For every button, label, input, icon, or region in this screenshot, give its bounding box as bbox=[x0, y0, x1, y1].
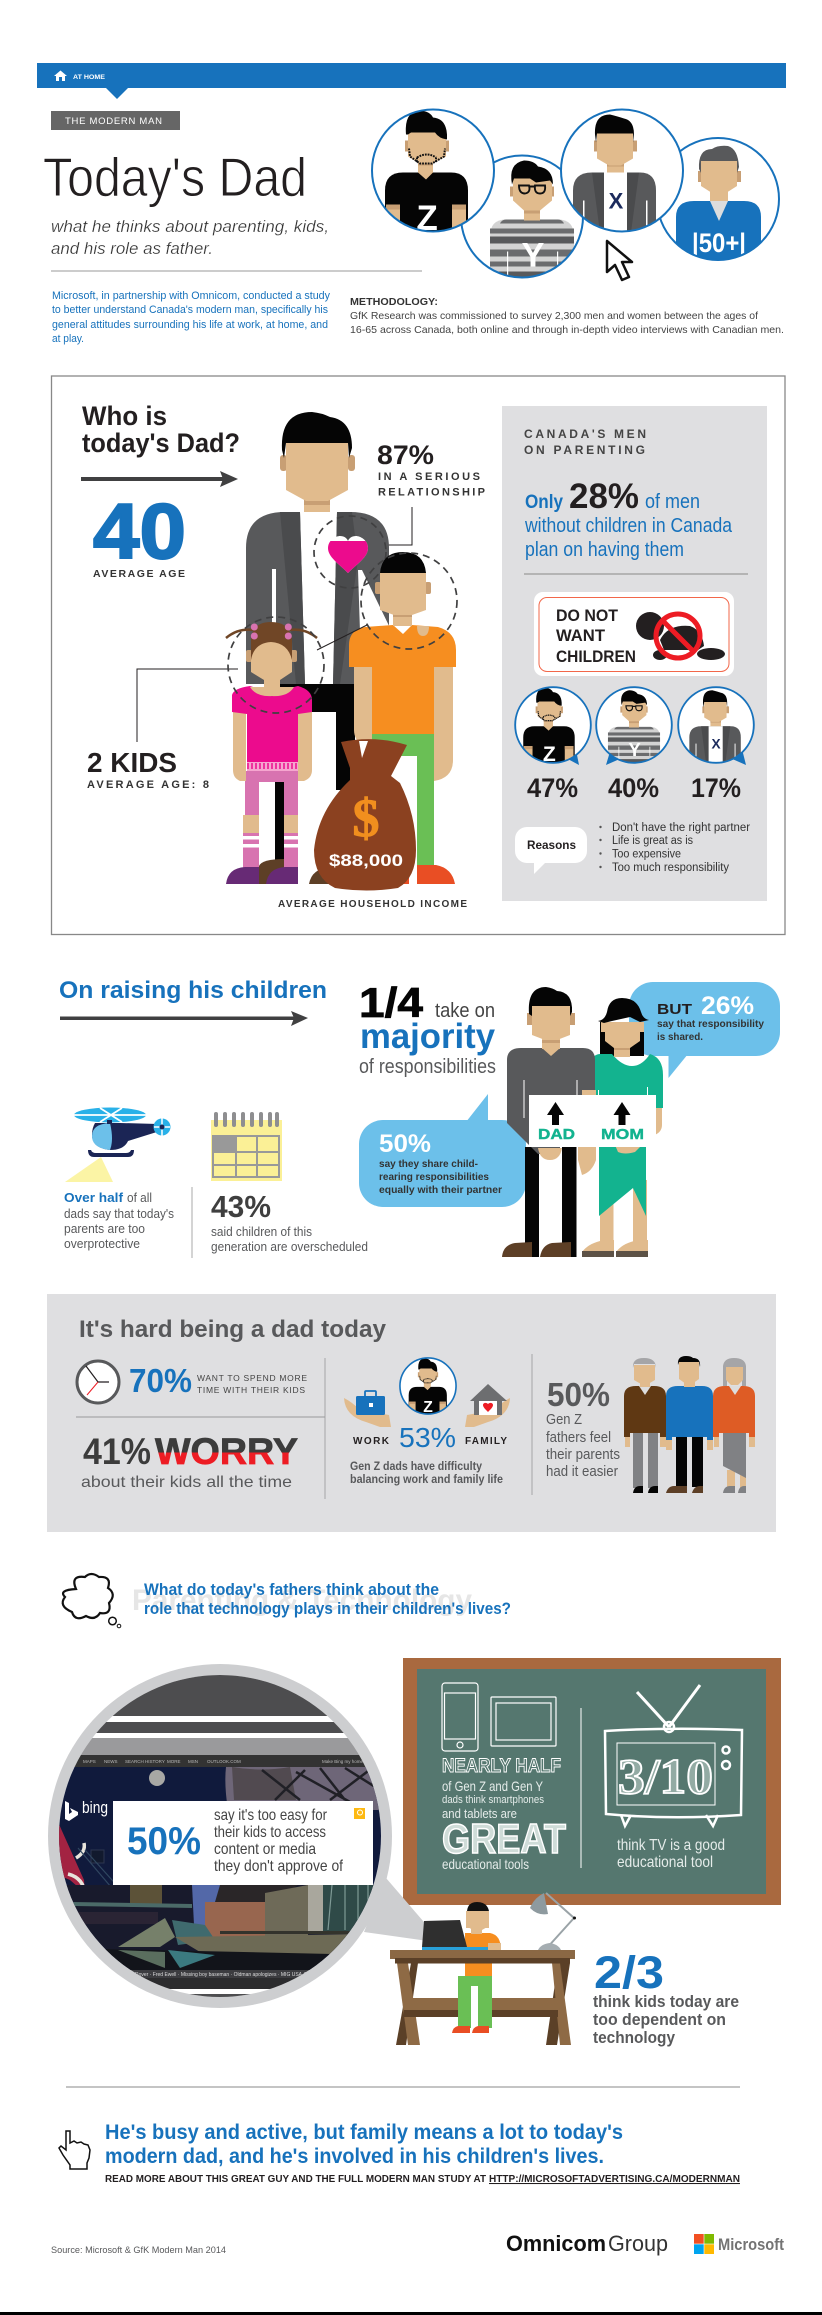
reasons list: Don't have the right partner bbox=[612, 822, 750, 834]
stat: 43% bbox=[211, 1189, 368, 1254]
portrait: X: X bbox=[609, 188, 624, 214]
stat: relationship bbox=[377, 440, 485, 498]
portrait: Z small: Z bbox=[543, 743, 556, 766]
reasons list bbox=[599, 822, 750, 874]
stat: 28%: of men bbox=[645, 491, 700, 513]
text: 26% shared: say that responsibility bbox=[657, 1018, 764, 1030]
portrait: Z small bbox=[515, 687, 591, 766]
icon: clock bbox=[77, 1361, 119, 1403]
card: 50%: they don't approve of bbox=[214, 1858, 343, 1875]
text: 26% shared: is shared. bbox=[657, 1031, 703, 1043]
callout: reasons: Reasons bbox=[527, 838, 576, 852]
moon bbox=[149, 1770, 165, 1786]
intro paragraph: Microsoft, in partnership with Omnicom, conducted a study bbox=[52, 290, 330, 302]
text: over half: Over half bbox=[64, 1190, 124, 1205]
card: do not want children: DO NOT bbox=[556, 606, 619, 625]
stat: 2/3: technology bbox=[593, 2028, 675, 2047]
stat: one quarter: take on bbox=[435, 1000, 495, 1022]
figure: grandmother bbox=[713, 1358, 755, 1493]
icon: home bbox=[54, 70, 67, 81]
title: Today's Dad bbox=[43, 146, 307, 208]
nav text: MSN bbox=[188, 1759, 198, 1764]
logo: microsoft bbox=[694, 2234, 784, 2254]
text: nearly half bbox=[442, 1756, 566, 1872]
portrait: X bbox=[561, 110, 683, 232]
stat: 28%: without children in Canada bbox=[524, 515, 733, 537]
text: nearly half: GREAT bbox=[442, 1815, 566, 1862]
header bar bbox=[37, 63, 786, 99]
figure: child legs bbox=[452, 1963, 492, 2033]
heading: today's Dad? bbox=[82, 428, 240, 458]
text: 50% share: say they share child- bbox=[379, 1158, 478, 1170]
stat: one quarter: majority bbox=[360, 1017, 496, 1056]
panel: it's hard being a dad today bbox=[47, 1294, 776, 1532]
portrait: 50+ bbox=[657, 138, 779, 261]
stat: 2/3 bbox=[593, 1947, 739, 2047]
nav text: MORE bbox=[167, 1759, 180, 1764]
portrait: Y small: Y bbox=[628, 739, 641, 760]
text: over half bbox=[64, 1190, 174, 1251]
text: nearly half: NEARLY HALF bbox=[442, 1756, 561, 1777]
icon: helicopter bbox=[65, 1108, 170, 1182]
figure: dad bbox=[502, 987, 596, 1257]
stat: kids: AVERAGE AGE: 8 bbox=[87, 779, 209, 791]
text: 50% share: equally with their partner bbox=[379, 1184, 502, 1196]
methodology: METHODOLOGY: bbox=[350, 296, 438, 308]
stat: kids bbox=[87, 747, 209, 791]
text: tv bbox=[617, 1837, 725, 1871]
lamp bbox=[530, 1893, 576, 1950]
stat: 2/3: too dependent on bbox=[593, 2010, 726, 2029]
sign: dad and mom bbox=[529, 1095, 656, 1147]
stat: relationship: IN A SERIOUS bbox=[378, 471, 480, 483]
heading: Who is bbox=[82, 401, 167, 431]
closing statement: He's busy and active, but family means a lot to today's bbox=[105, 2121, 623, 2144]
desk bbox=[390, 1950, 575, 2045]
stat: 43%: 43% bbox=[211, 1189, 271, 1224]
desk scene bbox=[390, 1893, 576, 2045]
arrow bbox=[81, 471, 238, 487]
text: nearly half: educational tools bbox=[442, 1856, 529, 1872]
icon: no baby bbox=[636, 612, 725, 660]
nav text: Make Bing my home bbox=[322, 1759, 364, 1764]
stat: 41% worry: WORRY bbox=[155, 1431, 298, 1472]
panel: canada's men on parenting bbox=[502, 406, 767, 901]
text: 50% share bbox=[379, 1130, 502, 1196]
stat: 28%: plan on having them bbox=[525, 539, 684, 561]
portrait: Y: Y bbox=[522, 236, 545, 274]
stat: 53%: Gen Z dads have difficulty bbox=[350, 1461, 483, 1473]
nav text: SEARCH HISTORY bbox=[125, 1759, 165, 1764]
stat: 2/3: think kids today are bbox=[593, 1992, 739, 2011]
stat: 41% worry bbox=[81, 1431, 298, 1491]
callout: reasons bbox=[515, 827, 587, 874]
stat: 50%: had it easier bbox=[546, 1463, 618, 1480]
icon: phone and tablet bbox=[442, 1683, 556, 1751]
section tag: the modern man bbox=[51, 111, 180, 130]
figure: father bbox=[666, 1356, 713, 1493]
subtitle bbox=[51, 217, 329, 258]
portrait: X small bbox=[678, 687, 754, 765]
text: over half: overprotective bbox=[64, 1236, 140, 1251]
news strip: Rover · Fred Ewell · Missing boy baseman · Oldman apologizes · MIG USA-Germany bbox=[135, 1972, 325, 1978]
panel heading bbox=[524, 427, 646, 457]
card: 50%: say it's too easy for bbox=[214, 1807, 328, 1824]
closing statement: HTTP://MICROSOFTADVERTISING.CA/MODERNMAN bbox=[489, 2173, 740, 2185]
methodology: GfK Research was commissioned to survey 2,300 men and women between the ages of bbox=[350, 310, 758, 322]
portrait: Y bbox=[461, 156, 583, 278]
panel: who is today's dad bbox=[52, 376, 785, 934]
photo background bbox=[55, 1767, 385, 1970]
reasons list: Too expensive bbox=[612, 848, 681, 860]
portrait: Y small bbox=[596, 687, 672, 765]
stat: relationship: 87% bbox=[377, 440, 434, 470]
subtitle: what he thinks about parenting, kids, bbox=[51, 217, 329, 236]
text: tv: think TV is a good bbox=[617, 1837, 725, 1854]
stat: 28%: 28% bbox=[569, 477, 639, 516]
intro paragraph: at play. bbox=[52, 333, 84, 345]
technology question: What do today's fathers think about the bbox=[144, 1580, 439, 1599]
nav text: MAPS bbox=[83, 1759, 96, 1764]
icon: television bbox=[605, 1685, 742, 1826]
portrait: X small: X bbox=[711, 737, 721, 752]
stat: 41% worry: 41% bbox=[83, 1431, 151, 1472]
text: nearly half: dads think smartphones bbox=[442, 1794, 544, 1806]
stat: one quarter: of responsibilities bbox=[359, 1056, 496, 1078]
card: 50%: their kids to access bbox=[214, 1824, 326, 1841]
nav text: OUTLOOK.COM bbox=[207, 1759, 241, 1764]
sign: dad and mom: MOM bbox=[601, 1126, 644, 1143]
arrow bbox=[60, 1011, 308, 1026]
bing logo: bing bbox=[82, 1798, 108, 1817]
stat: 53% bbox=[350, 1422, 507, 1486]
text: tv: educational tool bbox=[617, 1854, 713, 1871]
figure: mom bbox=[582, 998, 663, 1257]
sign: dad and mom: DAD bbox=[538, 1126, 575, 1143]
text: over half: parents are too bbox=[64, 1221, 145, 1236]
heading bbox=[82, 401, 240, 458]
magnifier: bing screenshot bbox=[48, 1664, 442, 2008]
card: 50%: content or media bbox=[214, 1841, 316, 1858]
portrait: Z work life: Z bbox=[423, 1399, 433, 1416]
text: 26% shared: BUT bbox=[657, 1001, 692, 1018]
intro paragraph bbox=[52, 290, 330, 345]
text: over half: of all bbox=[127, 1190, 152, 1205]
stat: 70% bbox=[129, 1362, 307, 1399]
icon: hand pointer bbox=[59, 2131, 90, 2169]
methodology: 16-65 across Canada, both online and through in-depth video interviews with Canadian men. bbox=[350, 324, 784, 336]
stat: 3/10: 3/10 bbox=[618, 1748, 713, 1804]
logo: omnicom group bbox=[506, 2231, 668, 2256]
card: do not want children: CHILDREN bbox=[556, 647, 636, 666]
percentages: 47% bbox=[527, 773, 578, 803]
laptop bbox=[422, 1920, 488, 1950]
bing logo bbox=[65, 1801, 108, 1821]
icon: money bag: $ bbox=[352, 788, 380, 848]
stat: 43%: generation are overscheduled bbox=[211, 1239, 368, 1254]
stat: 50%: 50% bbox=[547, 1376, 610, 1413]
icon: work in hand bbox=[344, 1391, 391, 1427]
stat: 70%: WANT TO SPEND MORE bbox=[197, 1373, 307, 1383]
icon: family in hand bbox=[465, 1384, 510, 1427]
stat: 43%: said children of this bbox=[211, 1224, 312, 1239]
portrait: 50+: |50+| bbox=[692, 228, 746, 258]
closing statement bbox=[105, 2121, 740, 2185]
methodology bbox=[350, 296, 784, 336]
nav text: NEWS bbox=[104, 1759, 118, 1764]
logo: omnicom group: Group bbox=[608, 2231, 668, 2256]
text: 26% shared: 26% bbox=[701, 992, 754, 1020]
portrait: Z: Z bbox=[416, 199, 438, 238]
stat: 70%: TIME WITH THEIR KIDS bbox=[197, 1385, 305, 1395]
icon: thought cloud bbox=[63, 1574, 121, 1628]
intro paragraph: to better understand Canada's modern man, specifically his bbox=[52, 304, 328, 316]
nav text bbox=[83, 1760, 363, 1764]
technology question: role that technology plays in their children's lives? bbox=[144, 1599, 511, 1618]
stat: 53%: FAMILY bbox=[465, 1436, 507, 1447]
panel heading: ON PARENTING bbox=[524, 443, 645, 457]
stat: 53%: 53% bbox=[399, 1422, 456, 1453]
reasons list: Too much responsibility bbox=[612, 862, 729, 874]
panel heading: CANADA'S MEN bbox=[524, 427, 646, 441]
section: on raising his children bbox=[59, 977, 780, 1258]
card: do not want children bbox=[534, 592, 734, 676]
subtitle: and his role as father. bbox=[51, 239, 213, 258]
figure: dad bbox=[246, 412, 392, 884]
logo: omnicom group: Omnicom bbox=[506, 2231, 606, 2256]
heading: It's hard being a dad today bbox=[79, 1316, 387, 1343]
section ghost title: Parenting & Technology bbox=[132, 1584, 472, 1617]
label: income: AVERAGE HOUSEHOLD INCOME bbox=[278, 899, 467, 910]
closing statement: READ MORE ABOUT THIS GREAT GUY AND THE FULL MODERN MAN STUDY AT bbox=[105, 2173, 487, 2185]
card: 50% bbox=[113, 1801, 373, 1885]
stat: 41% worry: about their kids all the time bbox=[81, 1474, 292, 1491]
stat: 53%: WORK bbox=[353, 1436, 390, 1447]
stat: average age: 40 bbox=[93, 487, 186, 575]
card: 50%: 50% bbox=[127, 1820, 201, 1863]
callout: 50% share bbox=[359, 1094, 526, 1207]
text: 26% shared bbox=[657, 992, 764, 1043]
lower photo bbox=[58, 1885, 378, 1970]
icon: calendar bbox=[211, 1112, 282, 1181]
percentages bbox=[527, 773, 741, 803]
heading: On raising his children bbox=[59, 977, 327, 1004]
intro paragraph: general attitudes surrounding his life at work, at home, and bbox=[52, 319, 328, 331]
stat: 28% bbox=[524, 477, 733, 561]
closing statement: modern dad, and he's involved in his children's lives. bbox=[105, 2145, 604, 2168]
icon: heart bbox=[328, 536, 368, 573]
reasons list: Life is great as is bbox=[612, 835, 693, 847]
stat: 50%: fathers feel bbox=[546, 1429, 611, 1446]
figure: girl bbox=[226, 622, 317, 884]
portrait: Z bbox=[372, 110, 494, 238]
stat: 50%: their parents bbox=[546, 1446, 620, 1463]
callout: 26% shared bbox=[629, 982, 780, 1078]
stat: 50% bbox=[546, 1376, 620, 1480]
text: nearly half: and tablets are bbox=[442, 1806, 517, 1821]
figure: child torso bbox=[465, 1902, 501, 1950]
stat: 70%: 70% bbox=[129, 1362, 192, 1399]
chalkboard bbox=[403, 1658, 781, 1905]
logo: microsoft: Microsoft bbox=[718, 2235, 784, 2254]
stat: one quarter bbox=[359, 979, 496, 1078]
icon: money bag bbox=[314, 739, 416, 890]
stat: kids: 2 KIDS bbox=[87, 747, 177, 778]
figure: boy bbox=[349, 552, 456, 884]
text: 50% share: rearing responsibilities bbox=[379, 1171, 489, 1183]
card: do not want children: WANT bbox=[556, 626, 606, 645]
stat: 50%: Gen Z bbox=[546, 1411, 582, 1428]
generation portraits bbox=[372, 110, 779, 278]
figure: grandfather bbox=[624, 1358, 666, 1493]
stat: 28%: Only bbox=[525, 492, 563, 513]
icon: money bag: $88,000 bbox=[329, 851, 403, 870]
text: 50% share: 50% bbox=[379, 1130, 431, 1158]
stat: average age: AVERAGE AGE bbox=[93, 568, 185, 580]
section tag: the modern man: THE MODERN MAN bbox=[65, 116, 162, 127]
source: Source: Microsoft & GfK Modern Man 2014 bbox=[51, 2245, 226, 2256]
icon: cursor bbox=[607, 241, 632, 280]
technology question bbox=[144, 1580, 511, 1618]
header bar: AT HOME bbox=[73, 74, 106, 81]
percentages: 17% bbox=[691, 773, 741, 803]
stat: 53%: balancing work and family life bbox=[350, 1474, 503, 1486]
percentages: 40% bbox=[608, 773, 659, 803]
text: over half: dads say that today's bbox=[64, 1206, 174, 1221]
stat: 2/3: 2/3 bbox=[594, 1947, 664, 1998]
stat: relationship: RELATIONSHIP bbox=[378, 486, 485, 498]
portrait: Z work life bbox=[400, 1358, 456, 1416]
stat: one quarter: 1/4 bbox=[359, 979, 424, 1026]
text: nearly half: of Gen Z and Gen Y bbox=[442, 1778, 544, 1794]
